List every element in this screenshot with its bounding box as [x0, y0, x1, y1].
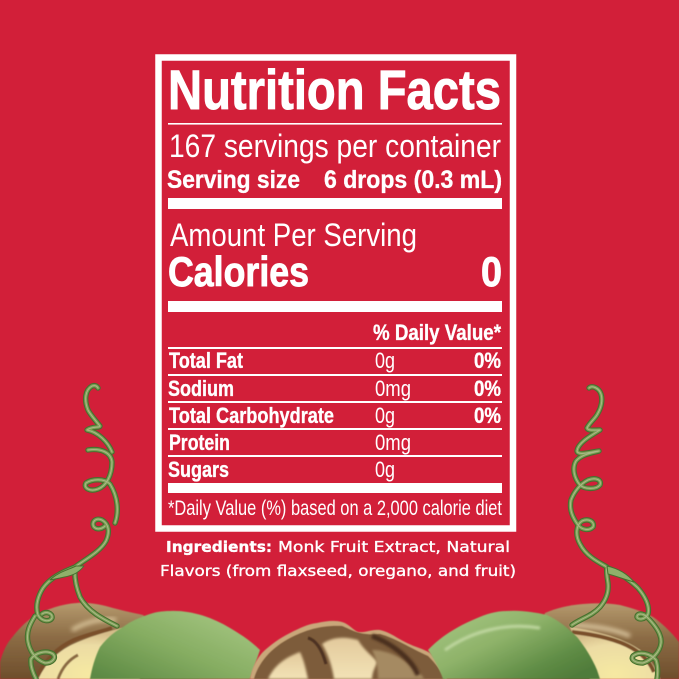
row: sodium: Sodium: [168, 376, 234, 401]
ingredients: Ingredients:: [166, 538, 272, 556]
row: sugars: [168, 457, 395, 482]
illustration: right vine: [570, 387, 661, 679]
row: total carbohydrate: 0%: [474, 403, 501, 428]
illustration: left green monk fruit: [90, 611, 260, 679]
ingredients: Flavors (from flaxseed, oregano, and fruit): [160, 562, 516, 580]
illustration: left vine: [27, 386, 117, 679]
row: total carbohydrate: Total Carbohydrate: [169, 403, 334, 428]
row: sodium: 0%: [474, 376, 501, 401]
serving size: [167, 166, 502, 194]
serving size: 6 drops (0.3 mL): [324, 166, 502, 194]
ingredients: Monk Fruit Extract, Natural: [278, 538, 510, 556]
row: total fat: [169, 348, 501, 373]
footnote: *Daily Value (%) based on a 2,000 calorie diet: [168, 497, 502, 520]
calories: 0: [481, 248, 502, 295]
title: Nutrition Facts: [168, 58, 501, 121]
servings per container: 167 servings per container: [169, 128, 501, 164]
ingredients: [160, 538, 516, 580]
illustration: right green monk fruit: [428, 611, 600, 679]
row: protein: [169, 430, 411, 455]
calories: [168, 248, 502, 295]
row: total fat: 0g: [375, 348, 395, 373]
row: total fat: Total Fat: [169, 348, 244, 373]
row: protein: 0mg: [375, 430, 411, 455]
row: sugars: 0g: [375, 457, 395, 482]
panel frame: [158, 58, 513, 528]
illustration: center open monk fruit: [250, 621, 447, 679]
row: total carbohydrate: 0g: [375, 403, 395, 428]
illustration: right brown monk fruit: [520, 603, 679, 679]
serving size: Serving size: [167, 166, 300, 194]
row: total carbohydrate: [169, 403, 501, 428]
calories: Calories: [168, 248, 309, 295]
row: sugars: Sugars: [168, 457, 229, 482]
row: sodium: 0mg: [375, 376, 411, 401]
row: protein: Protein: [169, 430, 230, 455]
amount per serving: Amount Per Serving: [170, 217, 417, 253]
illustration: left brown monk fruit: [0, 603, 200, 679]
row: sodium: [168, 376, 501, 401]
nutrition facts panel: [158, 58, 513, 528]
daily value header: % Daily Value*: [373, 320, 501, 345]
row: total fat: 0%: [474, 348, 501, 373]
